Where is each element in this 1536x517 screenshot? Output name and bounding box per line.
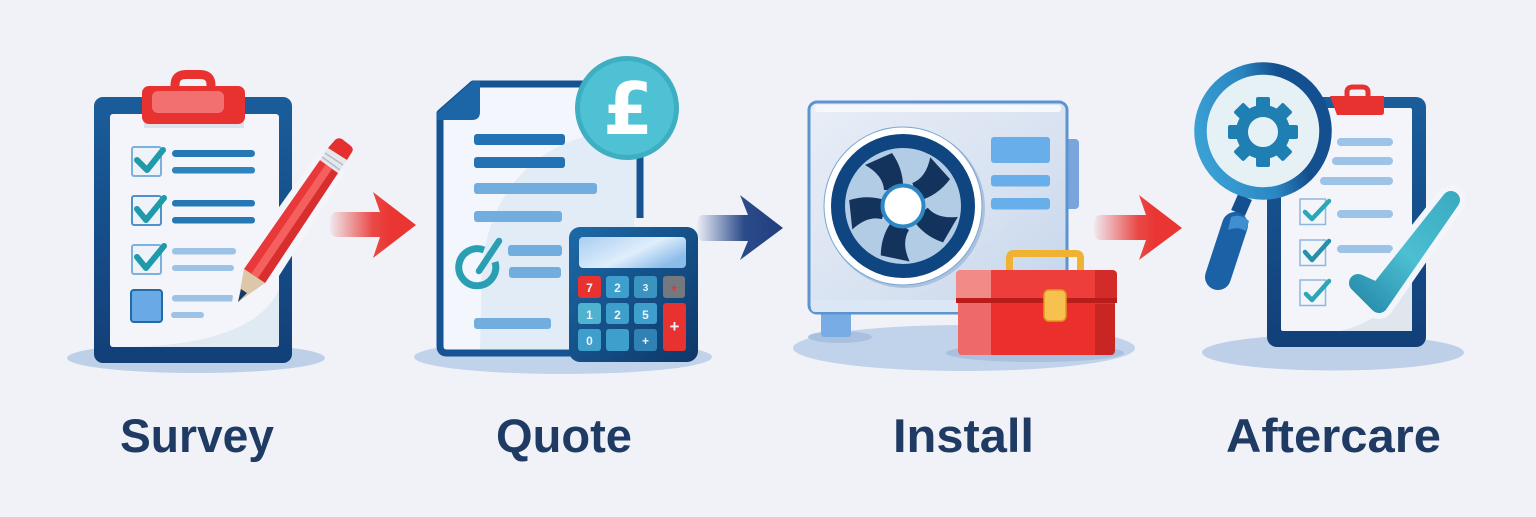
- calculator keys: +: [670, 317, 680, 336]
- checklist row 4: [131, 290, 234, 322]
- checklist row 2: [132, 196, 255, 225]
- icon: gear: [1228, 97, 1298, 167]
- calculator keys: 2: [614, 281, 621, 295]
- icon: calculator: [569, 227, 698, 362]
- document text lines: [474, 134, 597, 329]
- icon: pound badge: £: [603, 67, 653, 151]
- calculator keys: 1: [586, 308, 593, 322]
- unit casing: [809, 102, 1067, 313]
- ground shadow: aftercare: [1202, 334, 1464, 370]
- panel: survey clipboard illustration: [67, 74, 353, 373]
- icon: pound badge: [575, 56, 679, 160]
- panel: quote document illustration: [414, 56, 712, 374]
- calculator keys: +: [670, 281, 678, 295]
- unit vents: [991, 137, 1050, 210]
- unit foot: [821, 310, 851, 337]
- calculator keys: 3: [643, 283, 649, 294]
- checklist row 3: [132, 245, 236, 274]
- ground shadow: quote: [414, 340, 712, 374]
- toolbox latch: [1044, 290, 1066, 321]
- magnifier neck: [1238, 197, 1245, 213]
- calculator keys: 7: [586, 281, 593, 295]
- clipboard board: [94, 97, 292, 363]
- icon: large tick: [1358, 200, 1451, 304]
- calculator keys: +: [642, 334, 649, 348]
- panel: install heat pump illustration: [793, 102, 1135, 371]
- ground shadow: install: [793, 325, 1135, 371]
- aftercare clipboard board: [1267, 97, 1426, 347]
- icon: fan: [824, 127, 985, 288]
- icon: seal tick: [459, 241, 499, 286]
- fan blades: [841, 153, 965, 271]
- label: Aftercare: Aftercare: [1226, 409, 1441, 462]
- label: Install: Install: [893, 409, 1034, 462]
- label: Survey: Survey: [120, 409, 274, 462]
- icon: toolbox: [956, 254, 1117, 355]
- calculator keys: 2: [614, 308, 621, 322]
- calculator screen: [579, 237, 686, 268]
- toolbox shadow: [946, 344, 1124, 362]
- aftercare checklist: [1300, 199, 1329, 306]
- icon: pencil: [238, 138, 353, 303]
- clipboard clip: [142, 74, 245, 124]
- toolbox base: [958, 298, 1115, 355]
- magnifier handle: [1218, 225, 1235, 277]
- arrow: install to aftercare: [1094, 195, 1182, 260]
- aftercare clipboard paper: [1281, 108, 1412, 331]
- toolbox lid: [956, 270, 1117, 300]
- icon: magnifying glass: [1200, 68, 1326, 277]
- unit side tab: [1063, 139, 1079, 209]
- aftercare text lines: [1320, 138, 1393, 253]
- aftercare clipboard clip: [1330, 87, 1384, 115]
- magnifier lens: [1200, 68, 1326, 194]
- calculator keys: 5: [642, 308, 649, 322]
- handle highlight: [1228, 216, 1249, 231]
- arrow: survey to quote: [330, 192, 416, 258]
- label: Quote: Quote: [496, 409, 632, 462]
- clipboard paper: [110, 114, 279, 347]
- checklist row 1: [132, 147, 255, 176]
- fan hub: [882, 186, 924, 226]
- foot shadow: [808, 331, 872, 343]
- arrow: quote to install: [697, 195, 783, 260]
- panel: aftercare illustration: [1200, 68, 1464, 370]
- calculator keys: [578, 276, 686, 351]
- quote document: [437, 81, 646, 353]
- ground shadow: survey: [67, 343, 325, 373]
- calculator keys: 0: [586, 334, 593, 348]
